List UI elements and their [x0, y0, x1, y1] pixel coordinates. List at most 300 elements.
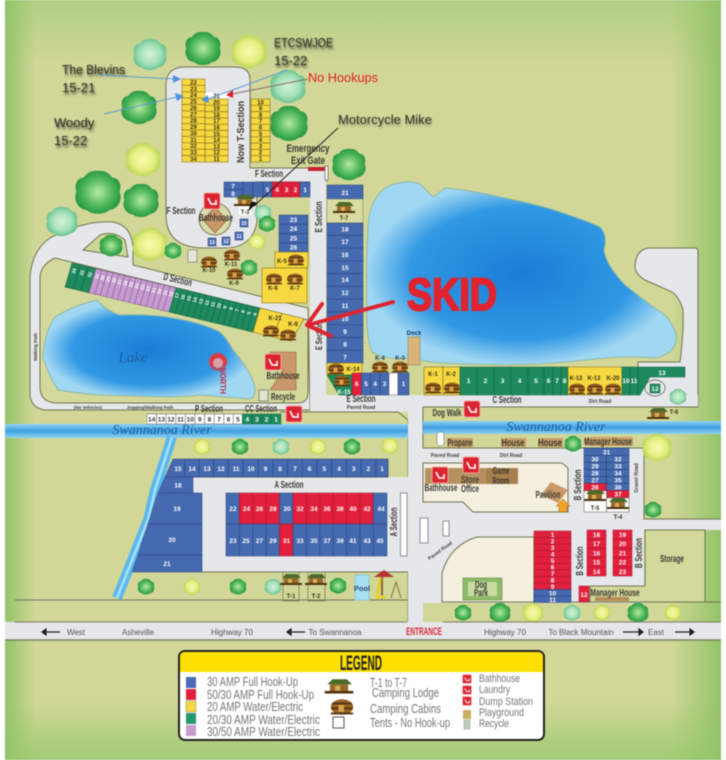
sites: A Section grid bottom: 35	[310, 538, 318, 545]
cabins: K-21 K-8: K-21	[268, 316, 282, 322]
highway: Highway 70	[484, 628, 526, 637]
label: A Section vertical: A Section	[388, 507, 400, 537]
sites: D Section row: 30	[100, 274, 107, 281]
sites: A Section grid bottom: 43	[363, 538, 371, 545]
sites: B Section upper: 28	[591, 470, 599, 478]
sites: A Section grid top: 36	[323, 506, 331, 513]
sites: 23 to 26: 23	[290, 217, 297, 224]
sites: B Section upper: 32	[614, 456, 622, 464]
label: Emergency Exit Gate	[286, 143, 330, 167]
sites: D Section row: 4	[252, 312, 259, 317]
arrow: The Blevins	[100, 75, 181, 83]
sites: E Section column: 10	[341, 316, 349, 323]
legend hookup labels: 50/30 AMP Full Hook-Up	[207, 688, 314, 702]
sites: A Section top row: 4	[337, 466, 341, 473]
lodges: T-1 T-2: T-1	[287, 594, 296, 600]
sites: A Section top row: 2	[367, 466, 371, 473]
legend hookup labels: 20/30 AMP Water/Electric	[207, 713, 320, 727]
sites: C Section row: 2	[484, 378, 488, 385]
sites: 23 to 26	[279, 215, 308, 252]
sites: B Section column two: 15	[593, 560, 600, 567]
sites: A Section grid top: 24	[243, 506, 250, 513]
label: E Section road: E Section	[346, 393, 376, 405]
sites: New T-Section, middle column: 14	[213, 138, 220, 144]
sites: CC Section: 2	[265, 416, 269, 424]
sites: F Section row: 3	[285, 187, 289, 194]
sites: New T-Section, left column: 25	[190, 100, 197, 106]
icon: gate	[308, 166, 328, 180]
sites: P Section	[147, 414, 242, 424]
sites: P Section: 10	[187, 416, 194, 424]
icon: recycle bin upper	[188, 250, 197, 262]
sites: CC Section: 4	[245, 416, 249, 424]
icon: recycle	[259, 390, 295, 403]
sites: New T-Section, right column: 3	[259, 144, 263, 150]
label: storage: Storage	[660, 553, 684, 565]
sites: B Section column three: 20	[619, 541, 626, 548]
sites: A Section grid top: 38	[336, 506, 344, 513]
sites: D Section row: 11	[210, 301, 217, 308]
building: lakeside bathhouse: Bathhouse	[266, 370, 300, 382]
highway: West	[67, 628, 86, 637]
sites: D Section row: 9	[222, 305, 229, 309]
sites: A Section left block	[132, 477, 202, 572]
building: lakeside bathhouse	[265, 352, 300, 390]
buildings: row above road: Propane	[448, 437, 473, 449]
sites: F Section row: 7	[231, 184, 235, 190]
sites: New T-Section, middle column: 17	[213, 119, 220, 125]
legend amenity labels	[479, 673, 533, 730]
sites: New T-Section, left column: 30	[190, 131, 197, 137]
site 12 and manager house: 12	[580, 592, 588, 599]
label: C Section: C Section	[492, 394, 522, 406]
road labels lower: Gravel Road	[634, 463, 640, 493]
legend hookup labels: 20 AMP Water/Electric	[207, 700, 303, 714]
sites: New T-Section, right column: 9	[259, 107, 263, 113]
arrow: SKID	[307, 302, 393, 336]
sites: P Section: 14	[148, 416, 156, 424]
sites: B Section upper: 35	[614, 478, 622, 484]
path labels: Walking Path	[33, 333, 38, 361]
sites: A Section grid bottom: 25	[242, 538, 250, 545]
sites: E Section column: 16	[341, 252, 349, 259]
sites: A Section grid top: 44	[377, 506, 385, 513]
annotation: Woody: Woody	[54, 115, 95, 130]
cabin: T-6: T-6	[670, 410, 679, 416]
legend amenity labels: Laundry	[479, 684, 510, 696]
sites: New T-Section, left column: 32	[190, 144, 197, 150]
icon: dog walk	[464, 401, 480, 417]
buildings: bathhouse store office game room: Office	[461, 483, 479, 495]
lake: large right lake	[367, 182, 676, 365]
label: E Section upper: E Section	[313, 201, 325, 233]
sites: C Section row: 10	[622, 378, 630, 385]
sites: F Section pull-ins: 11	[236, 234, 242, 240]
cabins: C Section	[425, 372, 621, 394]
sites: A Section grid bottom: 41	[349, 538, 357, 545]
cabins: K-3 K-4: K-4	[375, 356, 385, 362]
sites: D Section row: 18	[168, 291, 175, 298]
cabin: T-7: T-7	[340, 216, 349, 222]
sites: D Section row: 15	[186, 295, 193, 302]
sites: D Section row: 10	[216, 302, 223, 309]
sites: A Section top row: 3	[352, 466, 356, 473]
sites: F Section pull-ins: 13	[209, 240, 215, 246]
sites: A Section top row: 5	[322, 466, 326, 473]
legend lodging icons	[325, 679, 353, 728]
sites: K-14 K-15 and E 1 to 6	[327, 363, 409, 395]
sites: New T-Section, middle column: 11	[213, 157, 220, 163]
highway: To Black Mountain	[548, 628, 614, 637]
sites: B Section upper: 29	[591, 464, 599, 470]
sites: B Section column one: 1	[551, 532, 555, 539]
sites: B Section column one: 5	[551, 558, 555, 565]
arrow: Motorcycle Mike	[249, 128, 338, 210]
sites: B Section column one: 7	[551, 571, 555, 578]
dog park	[463, 578, 502, 600]
icon: recycle: Recycle	[271, 391, 295, 403]
sites: K-14 K-15 and E 1 to 6: 4	[373, 381, 377, 388]
label: F Section top: F Section	[255, 168, 283, 180]
arrow: Woody	[104, 93, 184, 114]
sites: A Section grid top: 32	[296, 506, 304, 513]
sites: New T-Section, middle column: 20	[213, 100, 220, 106]
sites: F Section pull-ins: 12	[223, 239, 229, 245]
buildings: bathhouse store office game room: Store	[461, 474, 479, 486]
sites: New T-Section, left column: 28	[190, 119, 197, 125]
cabins: K-5 K-6 K-7: K-7	[290, 286, 300, 292]
sites: D Section row: 22	[145, 285, 153, 292]
legend amenity labels: Dump Station	[479, 696, 533, 708]
callout: SKID: SKID	[407, 269, 497, 320]
sites: A Section top row: 6	[308, 466, 312, 473]
sites: A Section top row: 13	[203, 466, 211, 473]
panel: center building area	[423, 463, 705, 602]
sites: A Section left block: 19	[173, 506, 181, 513]
sites: P Section: 12	[167, 416, 175, 424]
building: F Section bathhouse	[199, 193, 233, 235]
sites: A Section grid bottom: 27	[256, 538, 263, 545]
label: CC Section: CC Section	[245, 403, 277, 415]
labels: B Section lower: B Section	[574, 546, 586, 576]
pool	[354, 575, 370, 600]
sites: D Section row: 33	[79, 269, 86, 276]
sites: E Section column: 12	[341, 290, 349, 297]
sites: A Section top row: 14	[188, 466, 196, 473]
sites: E Section column: 21	[341, 190, 349, 197]
sites: B Section column two: 17	[593, 541, 600, 548]
cabins: C Section: K-1	[428, 372, 438, 378]
sites: New T-Section, right column: 6	[259, 126, 263, 132]
annotation: The Blevins: 15-21	[62, 80, 95, 95]
site 12 and manager house	[579, 586, 640, 602]
sites: CC Section: 3	[255, 416, 259, 424]
annotation: Woody: 15-22	[54, 133, 87, 148]
sites: K-14 K-15 and E 1 to 6: 1	[402, 381, 406, 388]
label: B Section upper: B Section	[572, 470, 584, 500]
sites: B Section column two: 18	[593, 532, 600, 539]
annotation: ETCSWJOE: ETCSWJOE	[274, 35, 333, 50]
sites: B Section column two	[587, 530, 606, 576]
icon: north compass	[209, 353, 227, 394]
sites: B Section column one: 2	[551, 538, 555, 546]
sites: New T-Section, right column: 8	[259, 113, 263, 119]
buildings: bathhouse store office game room: Room	[492, 475, 510, 487]
legend hookup labels: 30/50 AMP Water/Electric	[207, 725, 320, 739]
legend amenity labels: Recycle	[479, 718, 509, 730]
cabins: T-5 T-4: T-4	[614, 515, 623, 521]
legend amenity labels: Bathhouse	[479, 673, 520, 685]
sites: C Section row	[424, 367, 685, 395]
sites: D Section row: 16	[180, 294, 187, 301]
sites: A Section grid bottom: 45	[376, 538, 384, 545]
legend amenity icons	[463, 675, 471, 729]
annotation: ETCSWJOE	[274, 35, 333, 68]
sites: New T-Section, middle column: 19	[213, 107, 220, 113]
legend	[179, 651, 544, 740]
path labels: (No Vehicles)	[74, 405, 103, 410]
sites: A Section grid top	[226, 493, 387, 524]
river label right: Swannanoa River	[506, 420, 606, 435]
sites: New T-Section, right column: 7	[259, 119, 263, 125]
sites: E Section column: 14	[341, 277, 349, 284]
pavilion: Pavilion	[536, 489, 560, 501]
highway: Highway 70	[211, 628, 253, 637]
cabins: C Section: K-13	[587, 376, 601, 382]
sites: D Section row: 34	[71, 267, 78, 274]
sites: New T-Section, right column: 10	[257, 100, 264, 106]
legend: LEGEND	[340, 652, 382, 675]
sites: E Section column: 11	[342, 303, 349, 310]
sites: New T-Section, left column: 26	[190, 106, 197, 112]
sites: F Section pull-ins: 10	[241, 221, 247, 227]
annotation: The Blevins: The Blevins	[62, 62, 125, 77]
sites: A Section top row: 15	[174, 466, 182, 473]
cabins: T-5 T-4	[584, 490, 629, 521]
label: dirt road: Dirt Road	[589, 399, 611, 405]
cabins: K-5 K-6 K-7	[262, 252, 308, 303]
sites: New T-Section, left column: 23	[190, 87, 197, 93]
road labels lower: Paved Road	[431, 453, 459, 459]
sites: D Section row: 26	[122, 280, 130, 287]
sites: A Section left block: 18	[174, 482, 182, 490]
sites: A Section grid top: 34	[310, 506, 318, 513]
sites: New T-Section, left column: 29	[190, 125, 197, 131]
cabins: C Section: K-12	[569, 376, 583, 382]
buildings: row above road: House	[502, 437, 525, 449]
icon: playground	[374, 570, 401, 599]
sites: A Section top row	[165, 459, 388, 477]
site 12 island	[645, 380, 665, 396]
sites: New T-Section, right column: 5	[259, 132, 263, 138]
sites: C Section row: 11	[631, 378, 638, 385]
sites: New T-Section, left column: 27	[190, 112, 197, 118]
sites: New T-Section, right column: 4	[259, 138, 263, 144]
cabins: K-14 K-15: K-15	[337, 390, 351, 396]
labels: B Section lower: B Section	[633, 538, 645, 568]
sites: New T-Section, middle column: 21	[213, 94, 220, 100]
sites: C Section row: 5	[534, 378, 538, 385]
sites: K-14 K-15 and E 1 to 6: 6	[355, 381, 359, 388]
path labels: Jogging/Walking Path	[127, 405, 174, 410]
sites: New T-Section, left column: 31	[190, 138, 197, 144]
cabins: K-9 K-10 K-11: K-11	[225, 262, 238, 268]
sites: New T-Section, right column	[251, 99, 270, 163]
sites: E Section column	[327, 185, 363, 363]
sites: A Section grid top: 26	[256, 506, 263, 513]
buildings: bathhouse store office game room	[424, 457, 518, 495]
sites: C Section row: 4	[518, 378, 522, 385]
sites: B Section column three	[613, 530, 632, 576]
cabin: T-7	[333, 202, 355, 222]
sites: F Section pull-ins	[208, 219, 248, 246]
cabins: K-14 K-15: K-14	[346, 367, 360, 373]
cabins: K-5 K-6 K-7: K-6	[268, 286, 278, 292]
sites: New T-Section, right column: 2	[259, 151, 263, 157]
sites: D Section row: 25	[128, 281, 135, 288]
sites: C Section row: 8	[563, 378, 567, 385]
sites: D Section row: 20	[157, 288, 164, 295]
sites: B Section column three: 23	[619, 569, 626, 576]
highway: To Swannanoa	[309, 628, 362, 637]
sites: P Section: 8	[208, 416, 212, 424]
sites: A Section grid bottom: 37	[323, 538, 331, 545]
river label left: Swannanoa River	[112, 423, 212, 438]
sites: B Section upper	[584, 448, 629, 498]
sites: 23 to 26: 24	[290, 226, 297, 233]
cabins: C Section: K-2	[446, 372, 456, 378]
sites: D Section row: 12	[204, 299, 211, 306]
pool: Pool	[354, 584, 370, 593]
tent pad: A Section	[400, 493, 407, 556]
sites: C Section row: 3	[501, 378, 505, 385]
buildings: row above road: Manager House	[584, 436, 632, 448]
sites: B Section column one: 4	[551, 552, 555, 558]
sites: P Section: 7	[217, 416, 221, 424]
buildings: bathhouse store office game room: Game	[492, 465, 510, 477]
sites: E Section column: 7	[343, 354, 347, 362]
building: F Section bathhouse: Bathhouse	[199, 212, 233, 224]
sites: B Section column one: 10	[549, 590, 556, 598]
sites: K-14 K-15 and E 1 to 6: 3	[383, 381, 387, 388]
sites: D Section row: 28	[111, 277, 118, 284]
sites: New T-Section, middle column: 18	[213, 113, 220, 119]
sites: D Section row: 23	[139, 284, 147, 291]
sites: E Section column: 17	[341, 239, 349, 246]
label: Emergency Exit Gate: Exit Gate	[291, 155, 325, 167]
sites: F Section row: 1	[303, 187, 307, 194]
sites: E Section column: 18	[341, 226, 349, 234]
sites: P Section: 5	[236, 416, 240, 424]
lodges: T-1 T-2: T-2	[312, 594, 321, 600]
label: A Section horizontal: A Section	[274, 479, 304, 491]
sites: A Section grid top: 22	[229, 506, 237, 513]
sites: P Section: 6	[227, 416, 231, 424]
sites: B Section upper: 37	[614, 492, 622, 498]
sites: B Section column three: 21	[619, 550, 626, 557]
sites: A Section grid bottom	[226, 524, 387, 556]
sites: B Section upper: 33	[614, 464, 622, 470]
sites: B Section column one: 9	[551, 584, 555, 591]
annotation: No Hookups: No Hookups	[308, 70, 378, 85]
label: P Section: P Section	[195, 403, 223, 415]
sites: F Section row	[224, 182, 310, 198]
highway	[5, 622, 721, 640]
sites: New T-Section, right column: 1	[259, 157, 263, 163]
cabins: C Section: K-20	[606, 376, 620, 382]
arrow: No Hookups	[226, 79, 308, 98]
cabins: K-9 K-10 K-11	[201, 250, 243, 287]
sites: A Section grid bottom: 29	[269, 538, 277, 545]
dock	[407, 331, 422, 365]
buildings: row above road	[437, 432, 633, 449]
sites: 23 to 26: 25	[290, 235, 297, 242]
sites: A Section top row: 12	[217, 466, 225, 473]
annotation: Motorcycle Mike: Motorcycle Mike	[338, 112, 432, 127]
icon: dump station	[286, 406, 302, 422]
label: dog walk: Dog Walk	[432, 407, 462, 419]
sites: B Section column one: 8	[551, 578, 555, 584]
sites: D Section row: 6	[240, 309, 247, 314]
road labels lower	[427, 453, 640, 562]
sites: C Section row: 6	[547, 378, 551, 385]
panel: ground lines	[15, 407, 721, 602]
sites: P Section: 13	[158, 416, 165, 424]
cabins: K-5 K-6 K-7: K-5	[277, 259, 287, 265]
label: Emergency Exit Gate: Emergency	[286, 143, 330, 155]
sites: B Section column three: 19	[619, 532, 626, 539]
sites: D Section row	[65, 263, 304, 343]
sites: New T-Section, middle column: 12	[213, 151, 220, 157]
cabins: K-3 K-4	[372, 356, 408, 372]
sites: A Section grid bottom: 31	[283, 538, 290, 545]
sites: D Section row: 21	[151, 287, 158, 294]
sites: B Section column one: 11	[549, 597, 556, 604]
sites: CC Section: 1	[274, 416, 278, 424]
sites: A Section grid bottom: 39	[336, 538, 344, 545]
sites: New T-Section, left column: 33	[190, 151, 197, 157]
sites: D Section row: 29	[105, 276, 113, 283]
sites: A Section grid bottom: 23	[229, 538, 237, 545]
cabins: K-21 K-8: K-8	[288, 322, 298, 328]
dog park: Park	[474, 587, 488, 599]
sites: A Section top row: 7	[293, 466, 297, 473]
legend swatches	[186, 677, 196, 736]
sites: A Section grid top: 40	[349, 506, 357, 513]
sites: D Section row: 13	[198, 298, 205, 305]
dog park: Dog	[475, 579, 487, 591]
arrow: ETCSWJOE	[201, 70, 287, 103]
sites: F Section row: 5	[266, 187, 270, 194]
sites: D Section row: 19	[162, 289, 170, 296]
annotation: Woody	[54, 115, 95, 148]
sites: 23 to 26: 26	[290, 245, 297, 252]
label: D Section: D Section	[162, 271, 193, 289]
sites: D Section row: 31	[94, 273, 101, 280]
labels: B Section lower	[574, 538, 645, 576]
sites: New T-Section, left column	[182, 79, 205, 163]
annotation: The Blevins	[62, 62, 125, 95]
sites: B Section upper: 30	[591, 456, 599, 464]
sites: F Section row: 8	[231, 191, 235, 198]
sites: New T-Section, middle column: 15	[213, 132, 220, 138]
river: Swannanoa	[5, 421, 721, 598]
buildings: bathhouse store office game room: Bathhouse	[424, 482, 458, 494]
sites: New T-Section, left column: 22	[190, 80, 197, 86]
path labels	[33, 333, 174, 410]
sites: New T-Section, middle column	[205, 93, 228, 163]
sites: D Section row: 27	[117, 278, 124, 285]
